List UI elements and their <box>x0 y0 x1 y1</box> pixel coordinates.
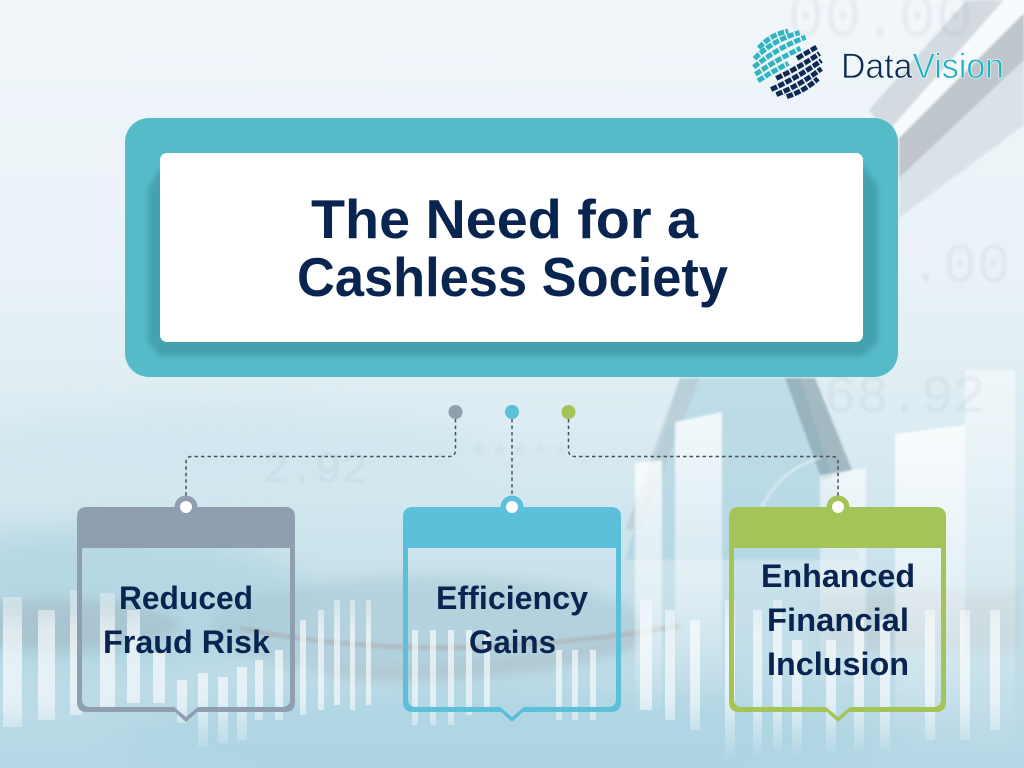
label: Reduced <box>119 580 253 616</box>
card: Enhanced Financial Inclusion <box>729 496 946 722</box>
background: tall translucent bars right <box>635 370 1015 760</box>
background: soft blue washes <box>0 410 880 768</box>
pin <box>174 496 198 518</box>
title: The Need for a <box>311 188 698 250</box>
logo: DataVision <box>743 20 1004 107</box>
teal outer frame <box>125 118 898 377</box>
inner shadow <box>148 166 878 356</box>
card frame <box>77 507 295 722</box>
card: Reduced Fraud Risk <box>77 496 295 722</box>
background: coin stack band <box>0 576 1020 680</box>
pin <box>826 496 850 518</box>
label <box>761 558 915 682</box>
title: Cashless Society <box>297 246 728 308</box>
card: Efficiency Gains <box>403 496 621 722</box>
label: Gains <box>469 624 556 660</box>
label <box>436 580 588 660</box>
panel: title card <box>125 118 898 377</box>
white title plate <box>160 153 863 342</box>
card frame <box>403 507 621 722</box>
logo wordmark: DataVision <box>841 47 1004 86</box>
background: upper-right diagonal beams <box>869 0 1024 218</box>
background: faint ticker digits: ***** <box>469 441 571 479</box>
label: Fraud Risk <box>103 624 270 660</box>
pin <box>500 496 524 518</box>
dot: grey <box>448 405 462 419</box>
label: Enhanced <box>761 558 915 594</box>
background: small white bars <box>3 590 1000 768</box>
background: faint ticker digits: .00 <box>910 235 1010 299</box>
icon: segmented globe <box>743 20 832 107</box>
connectors: dotted lines from three dots to cards <box>186 419 838 497</box>
title <box>297 188 728 308</box>
dot: green <box>562 405 576 419</box>
dot: blue <box>505 405 519 419</box>
label: Efficiency <box>436 580 588 616</box>
label <box>103 580 270 660</box>
background: faint ticker digits <box>262 0 1010 496</box>
background: faint ticker digits: 2.92 <box>262 446 368 496</box>
card frame <box>729 507 946 722</box>
background: faint ticker digits: 68.92 <box>824 368 986 429</box>
label: Inclusion <box>767 646 909 682</box>
label: Financial <box>767 602 909 638</box>
background: house-shaped dark roof <box>625 378 860 560</box>
